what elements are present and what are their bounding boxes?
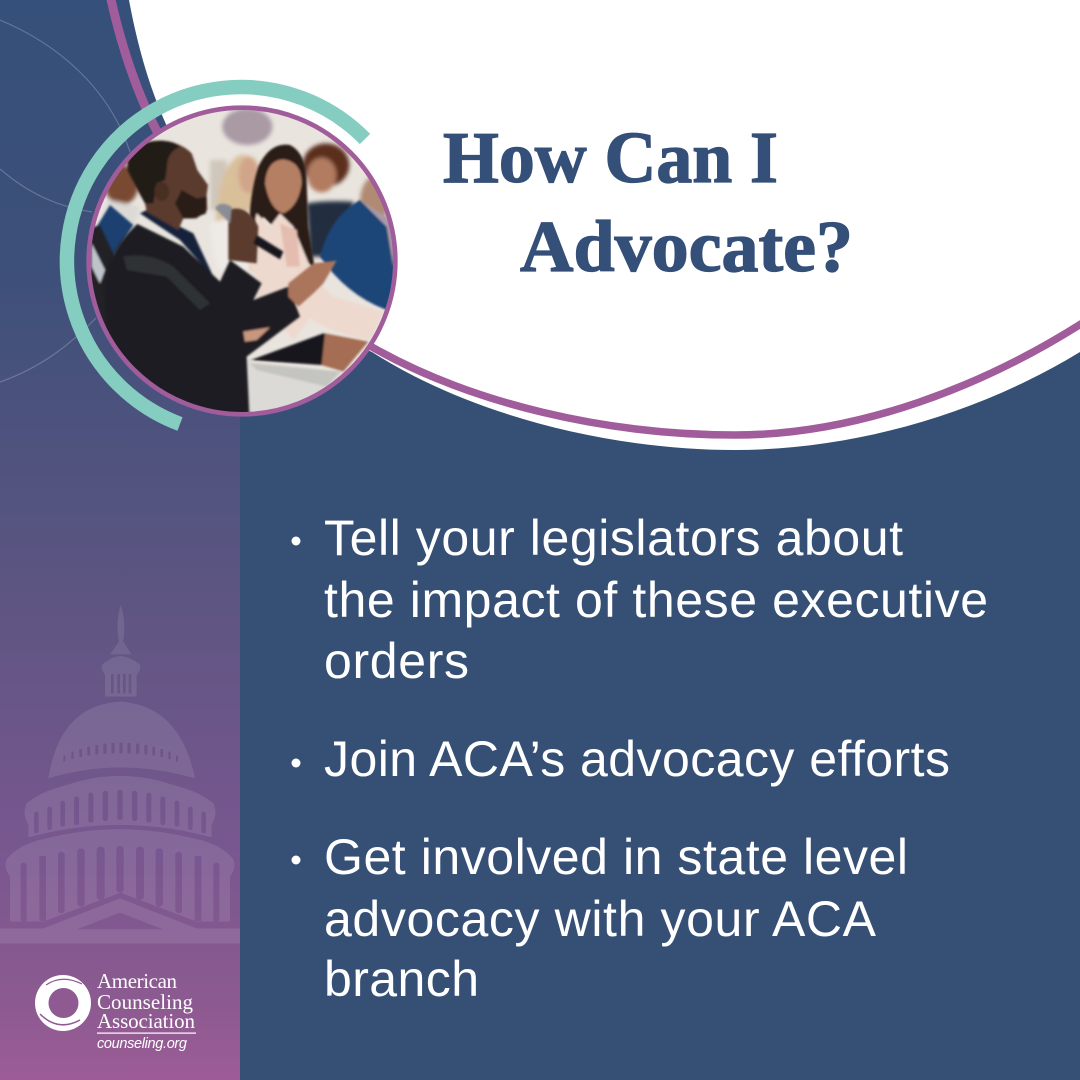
icon: logo ring <box>35 975 91 1031</box>
bullet: state level advocacy: branch <box>324 951 479 1007</box>
logo wordmark: American <box>97 969 178 993</box>
logo wordmark: Counseling <box>97 990 194 1014</box>
speaker <box>105 141 337 415</box>
capitol building watermark <box>0 605 240 943</box>
left gradient column <box>0 0 240 1080</box>
bullet list <box>292 510 988 1007</box>
bullet: tell legislators: orders <box>324 633 469 689</box>
bullet: tell legislators: the impact of these executive <box>324 572 988 628</box>
title <box>443 117 853 287</box>
ACA logo <box>35 969 196 1052</box>
white curved header panel <box>129 0 1080 450</box>
teal arc ring <box>67 87 365 424</box>
bullet: join ACA: Join ACA’s advocacy efforts <box>324 731 950 787</box>
logo wordmark: Association <box>97 1009 196 1033</box>
bullet: state level advocacy <box>292 829 908 1007</box>
bullet: state level advocacy: Get involved in state level <box>324 829 908 885</box>
title: Advocate? <box>520 206 853 287</box>
purple outline behind white curve, upper segment <box>110 0 170 155</box>
circular photo: speaker with microphone in audience <box>83 103 403 423</box>
title: How Can I <box>443 117 778 198</box>
logo wordmark <box>97 969 196 1033</box>
bullet: tell legislators <box>292 510 988 689</box>
decorative thin circle lines <box>0 20 130 382</box>
bullet: tell legislators: Tell your legislators about <box>324 510 903 566</box>
logo url: counseling.org <box>97 1036 187 1052</box>
purple swoosh line <box>365 322 1080 435</box>
bullet: state level advocacy: advocacy with your ACA <box>324 891 877 947</box>
